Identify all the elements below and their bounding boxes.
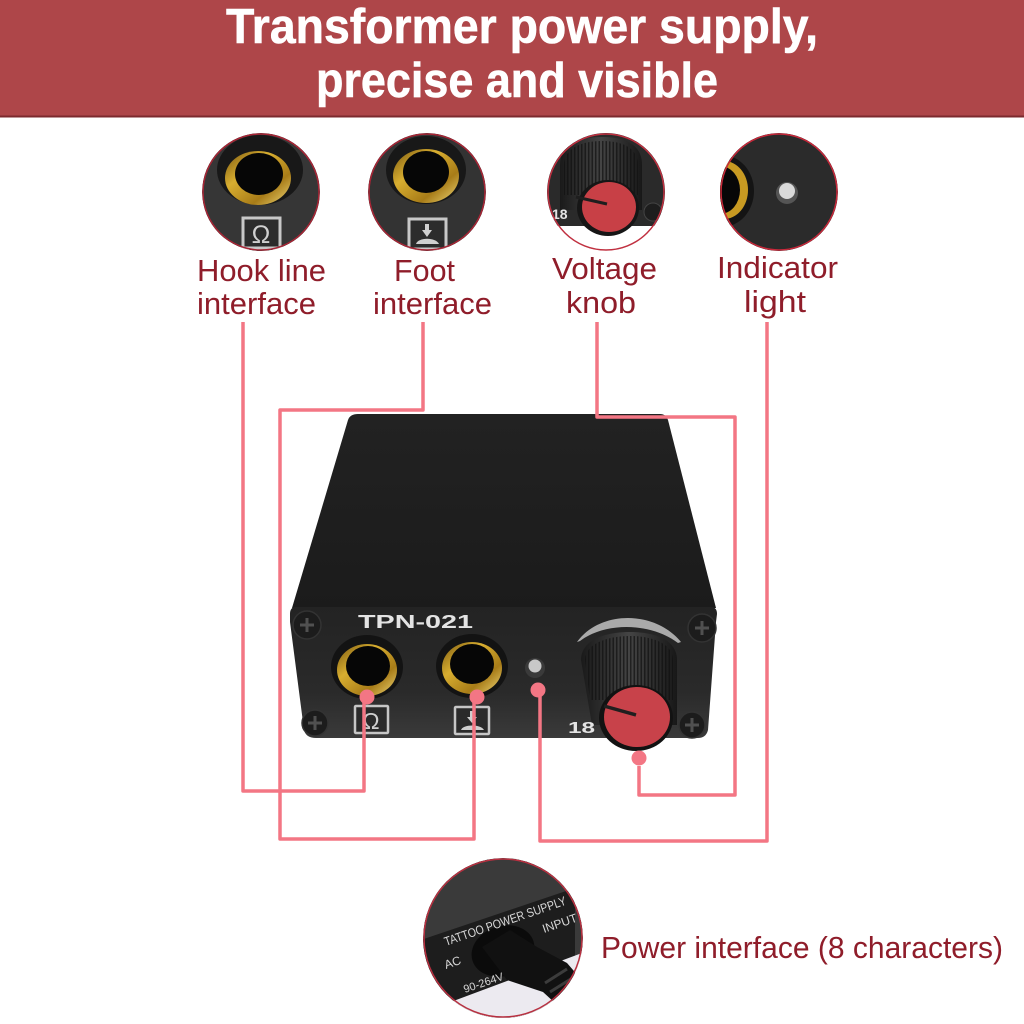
detail: hook line jack (202, 133, 320, 251)
indicator LED (525, 658, 545, 678)
label: indicator light: light (744, 284, 806, 319)
label: foot interface: interface (373, 286, 492, 321)
label: voltage knob: knob (566, 285, 636, 320)
label: voltage knob: Voltage (552, 251, 657, 286)
device front face (290, 607, 717, 738)
marker dots (360, 682, 646, 766)
screws (293, 611, 716, 738)
label: hook line interface: interface (197, 286, 316, 321)
label: hook line interface: Hook line (197, 253, 326, 288)
hook line symbol (355, 706, 388, 734)
leader line: voltage knob (597, 322, 735, 795)
device: power supply (290, 414, 717, 751)
detail: hook line jack: Ω (252, 221, 270, 249)
detail: power interface: 90-264V (462, 971, 506, 996)
voltage knob (568, 618, 681, 751)
left jack (331, 635, 403, 699)
label: indicator light: Indicator (717, 250, 838, 285)
detail: power interface (423, 858, 583, 1018)
label: foot interface: Foot (394, 253, 455, 288)
title banner: Transformer power supply, (226, 0, 818, 54)
leader line: hook line interface (243, 322, 364, 791)
foot symbol (455, 707, 489, 734)
detail: voltage knob: 18 (552, 206, 568, 222)
voltage knob: 18 (568, 720, 595, 737)
leader line: indicator light (540, 322, 767, 841)
detail: voltage knob (547, 133, 665, 251)
detail: foot jack (368, 133, 486, 251)
title banner: precise and visible (316, 54, 718, 108)
label: power interface: Power interface (8 characters) (601, 930, 1003, 965)
leader line: foot interface (280, 322, 474, 839)
detail: power interface: TATTOO POWER SUPPLY (442, 894, 569, 949)
right jack (436, 634, 508, 698)
title banner (0, 0, 1024, 118)
model name: TPN-021 (358, 612, 473, 632)
device top surface (292, 414, 716, 608)
hook line symbol: Ω (362, 708, 380, 734)
detail: indicator light (720, 133, 838, 251)
detail: power interface: INPUT (540, 911, 580, 936)
detail: power interface: AC (442, 953, 463, 972)
